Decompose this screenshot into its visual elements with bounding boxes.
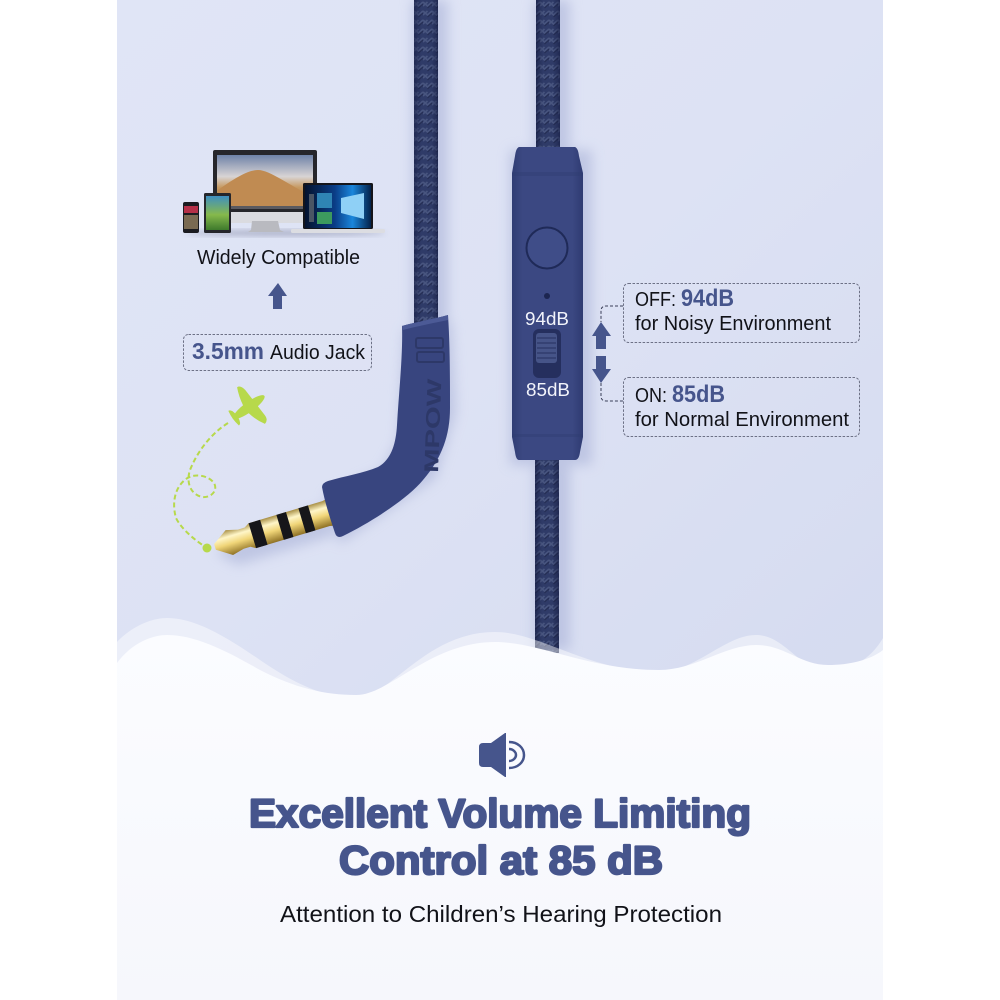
wave: lower band (117, 618, 883, 720)
mic hole (544, 293, 550, 299)
gold plug (211, 496, 340, 561)
laptop (291, 183, 385, 233)
arrow down (592, 356, 611, 383)
label: widely compatible: Widely Compatible (197, 247, 360, 269)
boot grip marks (416, 338, 444, 362)
title: Excellent Volume Limiting (249, 792, 751, 836)
icon: speaker (479, 733, 524, 777)
rubber boot (322, 315, 450, 537)
lower white section (117, 635, 883, 1000)
slider switch (533, 329, 561, 378)
devices illustration (183, 150, 385, 236)
callout: audio jack: 3.5mm (192, 338, 264, 364)
boot brand text: MPOW (421, 378, 446, 473)
boot highlight (402, 315, 448, 330)
phone (183, 202, 199, 233)
callout: audio jack: Audio Jack (270, 342, 366, 364)
callout: off 94dB: 94dB (681, 285, 734, 312)
airplane icon (219, 377, 278, 437)
device shadow (185, 230, 385, 236)
arrow up (592, 322, 611, 349)
cable: left braided (414, 0, 438, 326)
callout: off 94dB (624, 284, 860, 342)
callout: on 85dB (624, 378, 860, 436)
shadows of cable and parts (215, 0, 592, 650)
cable: right braided upper (536, 0, 560, 150)
desktop monitor (213, 150, 317, 232)
callout: on 85dB: 85dB (672, 381, 725, 408)
cable: right braided lower (535, 458, 559, 653)
callout: on 85dB: for Normal Environment (635, 409, 849, 431)
callout: on 85dB: ON: (635, 385, 667, 407)
tablet (204, 193, 231, 233)
button (526, 228, 568, 268)
remote body (512, 147, 583, 460)
audio jack (211, 315, 450, 561)
arrow up to devices (268, 283, 287, 309)
label 85dB: 85dB (526, 380, 570, 400)
subtitle: Attention to Children’s Hearing Protection (280, 901, 722, 927)
callout: off 94dB: OFF: (635, 289, 676, 311)
background panel (117, 0, 883, 700)
callout: off 94dB: for Noisy Environment (635, 313, 831, 335)
label 94dB: 94dB (525, 309, 569, 329)
connector lines (601, 306, 623, 401)
flight path start dot (202, 544, 212, 552)
dashed flight path (174, 423, 228, 548)
title: Control at 85 dB (339, 839, 663, 883)
title (249, 792, 751, 883)
inline remote (512, 147, 583, 460)
callout: audio jack (184, 334, 372, 370)
remote body bands (512, 172, 583, 437)
